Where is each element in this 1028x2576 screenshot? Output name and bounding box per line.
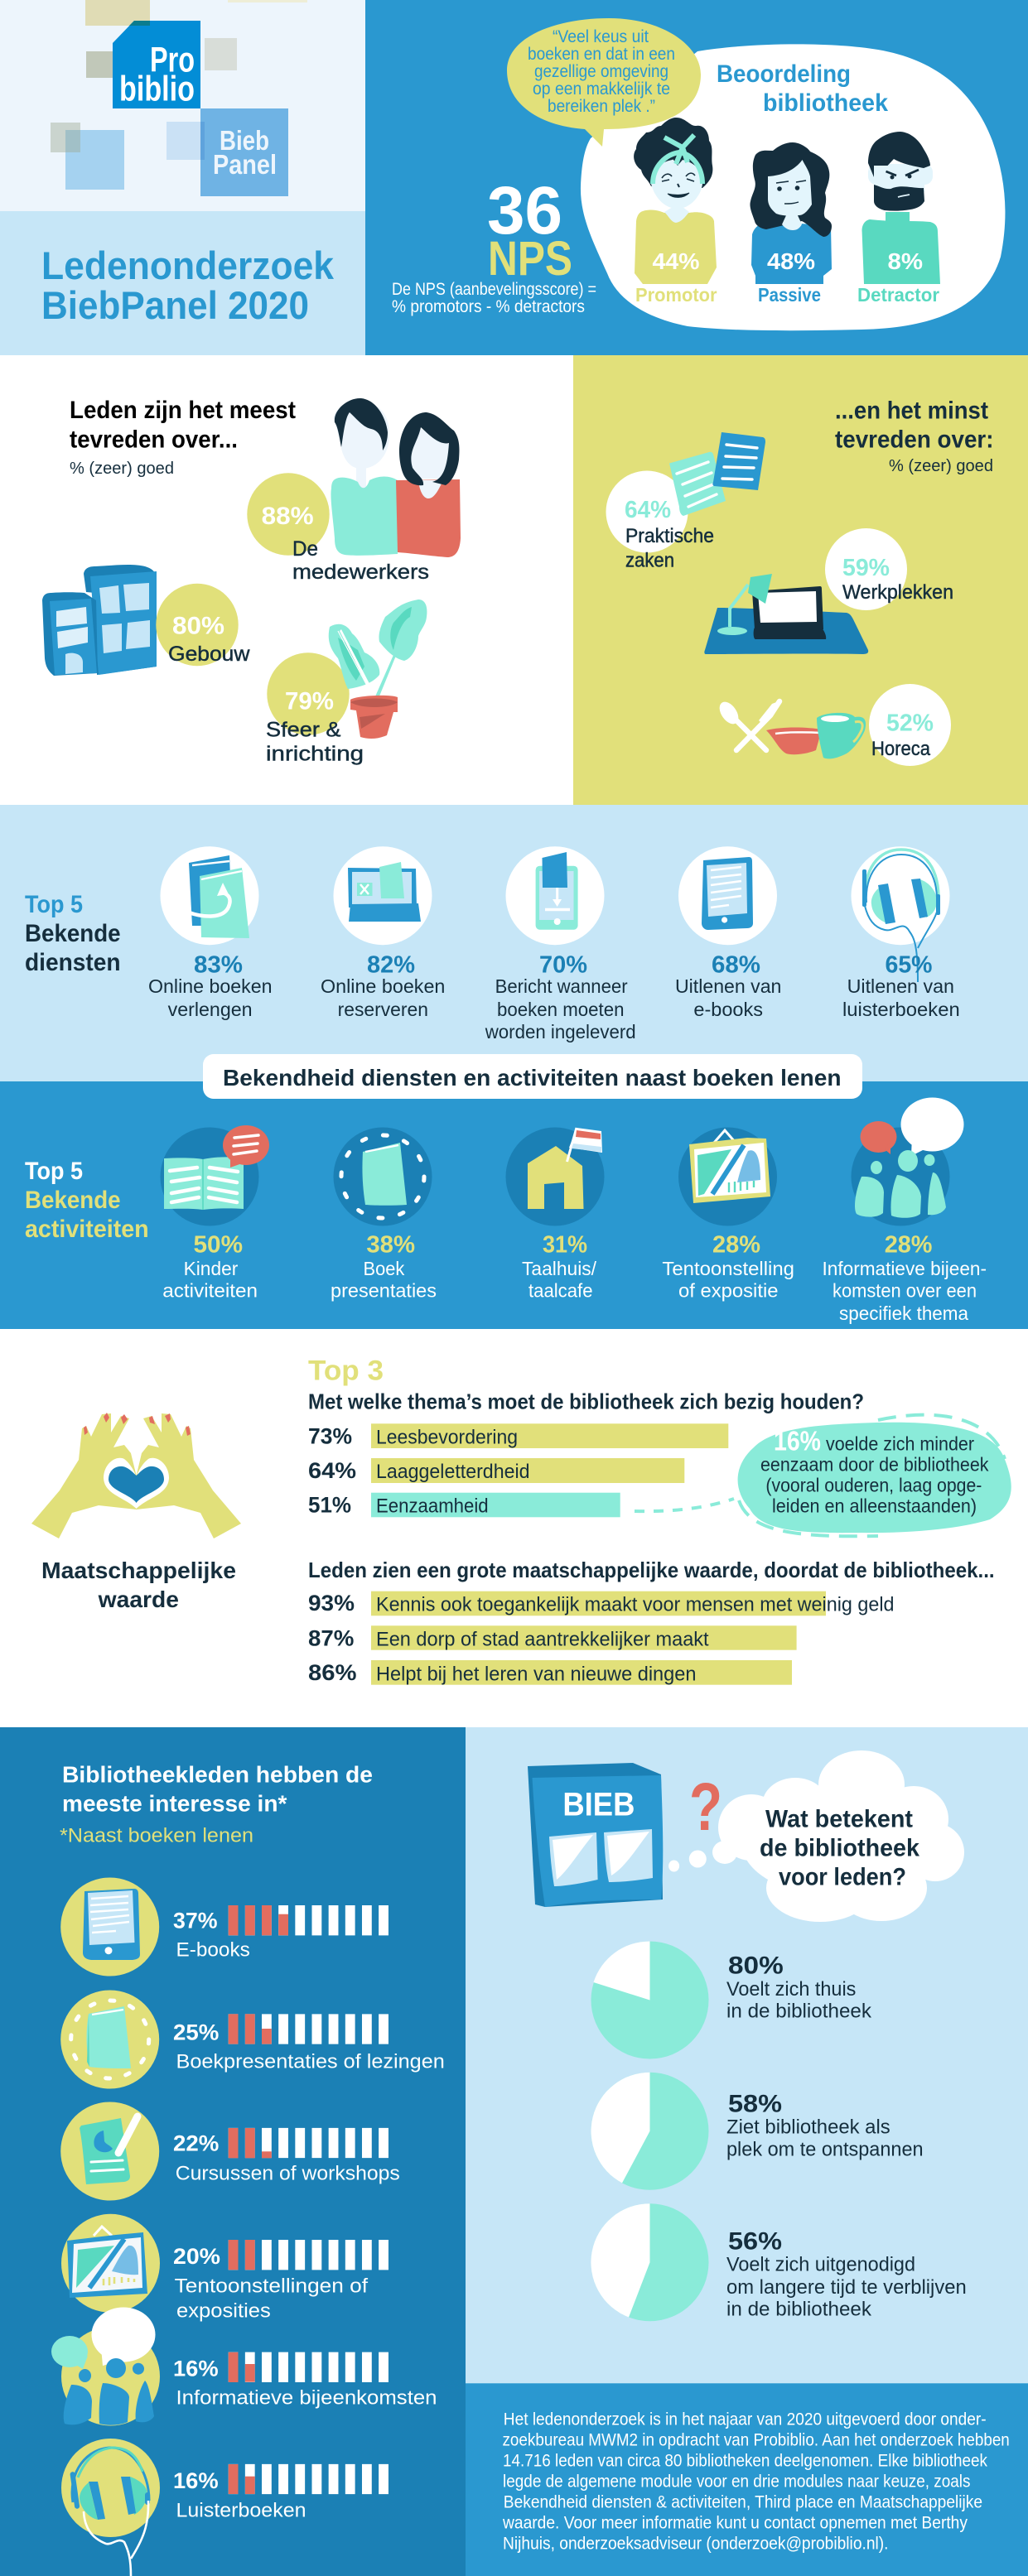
stat: uitgenodigd: om langere tijd te verblijven: [726, 2276, 967, 2299]
figure: promotor: Promotor: [635, 284, 717, 306]
service: e-books: Uitlenen van: [675, 975, 781, 997]
stat: sfeer en inrichting: Sfeer &: [266, 718, 341, 741]
activity: tentoonstelling: of expositie: [678, 1280, 779, 1302]
heading: top 3: Top 3: [308, 1355, 384, 1387]
title: [41, 243, 335, 327]
logo: BiebPanel: [200, 108, 288, 196]
service: online boeken verlengen: Online boeken: [148, 975, 272, 997]
stat: voelt zich thuis: in de bibliotheek: [726, 2001, 872, 2023]
row: informatieve bijeenkomsten: Informatieve bijeenkomsten: [176, 2386, 437, 2409]
heading: top 5 diensten: Top 5: [25, 891, 83, 918]
stat: voelt zich thuis: Voelt zich thuis: [726, 1978, 856, 2001]
text block: onderzoeksverantwoording: waarde. Voor meer informatie kunt u contact opnemen met Berthy: [502, 2513, 968, 2532]
logo: BiebPanel: Bieb: [220, 125, 269, 156]
NPS number: NPS: [488, 232, 572, 286]
logo: Probiblio: [113, 21, 200, 109]
heading: top 5 diensten: Bekende: [25, 920, 121, 947]
stat: praktische zaken: [606, 470, 714, 571]
stat: ontspannen: Ziet bibliotheek als: [726, 2116, 890, 2139]
row: e-books: E-books: [176, 1938, 250, 1961]
text block: onderzoeksverantwoording: Bekendheid diensten & activiteiten, Third place en Maatschappelijke: [504, 2492, 982, 2511]
heading: top 5 diensten: diensten: [25, 949, 121, 976]
heading: meest tevreden: % (zeer) goed: [70, 460, 174, 478]
icon: desk with laptop: [704, 574, 868, 654]
bar chart: maatschappelijke waarde: 86%: [308, 1660, 356, 1685]
quote bubble: op een makkelijk te: [533, 79, 670, 99]
service: bericht inleveren: [485, 846, 636, 1042]
icon: tableware: [716, 699, 866, 758]
stat: voelt zich thuis: [726, 1952, 872, 2023]
cloud with question: de bibliotheek: [760, 1835, 919, 1862]
quote bubble: [507, 18, 701, 147]
heading: meest tevreden: Leden zijn het meest: [70, 397, 296, 424]
text block: onderzoeksverantwoording: 14.716 leden van circa 80 bibliotheken deelgenomen. Elke bibliotheek: [503, 2451, 987, 2470]
service: luisterboeken: Uitlenen van: [847, 975, 954, 997]
bar chart: thema's: 64%: [308, 1458, 356, 1483]
stat: uitgenodigd: 56%: [728, 2228, 782, 2256]
service: online boeken reserveren: 82%: [367, 951, 415, 978]
bar chart: thema's: Laaggeletterdheid: [376, 1461, 530, 1483]
heading: Beoordeling bibliotheek: bibliotheek: [763, 89, 888, 117]
bar chart: maatschappelijke waarde: Kennis ook toegankelijk maakt voor mensen met weinig geld: [376, 1594, 895, 1616]
heading: top 5 diensten: [25, 891, 121, 976]
row: informatieve bijeenkomsten: 16%: [173, 2356, 219, 2381]
heading: minst tevreden: % (zeer) goed: [889, 457, 993, 475]
row: tentoonstellingen: Tentoonstellingen of: [175, 2275, 368, 2297]
row: boekpresentaties: [60, 1991, 445, 2088]
stat: praktische zaken: 64%: [625, 497, 671, 523]
icon: building: [42, 565, 157, 676]
stat: uitgenodigd: in de bibliotheek: [726, 2299, 872, 2321]
activity: boek presentaties: 38%: [366, 1231, 415, 1258]
stat: sfeer en inrichting: [266, 652, 364, 766]
heading: meeste interesse: [60, 1761, 373, 1847]
heading: meeste interesse: meeste interesse in*: [62, 1790, 287, 1816]
bar chart: maatschappelijke waarde: [308, 1591, 895, 1686]
stat: ontspannen: [726, 2091, 924, 2161]
stat: sfeer en inrichting: 79%: [285, 688, 334, 715]
white rating blob: [581, 44, 1005, 330]
logo: BiebPanel: Panel: [213, 149, 277, 180]
activity: taalhuis: taalcafe: [528, 1280, 593, 1302]
panel: wat betekent de bibliotheek: [466, 1727, 1028, 2384]
stat: medewerkers: De: [292, 537, 318, 561]
stat: uitgenodigd: [726, 2228, 967, 2321]
activity: informatieve bijeenkomsten: specifiek thema: [839, 1302, 968, 1324]
service: online boeken reserveren: [321, 846, 445, 1020]
title: Ledenonderzoek: [41, 243, 335, 287]
callout: minder eenzaam: eenzaam door de bibliotheek: [760, 1454, 989, 1476]
service: e-books: 68%: [712, 951, 760, 978]
activity: boek presentaties: presentaties: [331, 1280, 437, 1302]
service: luisterboeken: 65%: [885, 951, 933, 978]
row: cursussen: [60, 2102, 400, 2201]
heading: top 5 activiteiten: activiteiten: [25, 1216, 149, 1243]
callout: minder eenzaam: 16%: [774, 1426, 821, 1457]
service: luisterboeken: luisterboeken: [842, 999, 960, 1020]
stat: horeca: Horeca: [871, 738, 931, 760]
banner: Bekendheid diensten en activiteiten: [203, 1054, 862, 1099]
NPS definition: [392, 280, 596, 316]
pie chart: 80%: [591, 1941, 709, 2058]
callout: minder eenzaam: [635, 1415, 1011, 1536]
question heading: Met welke thema’s moet de bibliotheek zich bezig houden?: [308, 1389, 864, 1414]
icon: papers: [669, 432, 765, 516]
stat: horeca: [869, 684, 951, 766]
pie chart: 56%: [591, 2203, 709, 2321]
icon: BIEB building: BIEB: [562, 1787, 635, 1823]
cloud with question: [668, 1750, 964, 1922]
question heading: Leden zien een grote maatschappelijke waarde, doordat de bibliotheek...: [308, 1558, 995, 1582]
activity: tentoonstelling: Tentoonstelling: [662, 1258, 794, 1279]
service: online boeken verlengen: [148, 846, 272, 1020]
row: luisterboeken: [61, 2439, 389, 2576]
text block: onderzoeksverantwoording: legde de algemene module voor en drie modules naar keuze, zoals: [503, 2472, 971, 2491]
activity: taalhuis: 31%: [543, 1231, 587, 1258]
service: e-books: e-books: [693, 999, 763, 1020]
service: bericht inleveren: worden ingeleverd: [485, 1021, 636, 1042]
activity: kinder activiteiten: activiteiten: [162, 1280, 258, 1302]
callout: minder eenzaam: leiden en alleenstaanden): [772, 1495, 977, 1517]
heading: top 5 activiteiten: Bekende: [25, 1187, 121, 1214]
stat: gebouw: Gebouw: [168, 643, 250, 666]
activity: kinder activiteiten: Kinder: [184, 1258, 239, 1279]
cloud with question: voor leden?: [779, 1864, 906, 1891]
stat: werkplekken: 59%: [842, 555, 890, 581]
panel: most satisfied: [42, 397, 461, 766]
heading: maatschappelijke waarde: waarde: [98, 1587, 179, 1612]
activity: boek presentaties: Boek: [363, 1258, 405, 1279]
service: online boeken verlengen: verlengen: [168, 999, 253, 1020]
NPS number: [487, 173, 572, 286]
heading: Beoordeling bibliotheek: [717, 60, 888, 117]
service: online boeken reserveren: Online boeken: [321, 975, 445, 997]
activity: informatieve bijeenkomsten: 28%: [885, 1231, 933, 1258]
callout: minder eenzaam: voelde zich minder: [826, 1433, 974, 1455]
banner: Bekendheid diensten en activiteiten: Bekendheid diensten en activiteiten naast boeken lenen: [223, 1065, 842, 1091]
bar chart: thema's: 51%: [308, 1493, 351, 1518]
heading: top 5 activiteiten: Top 5: [25, 1158, 83, 1185]
panel: title: [0, 211, 365, 355]
row: luisterboeken: 16%: [173, 2468, 219, 2493]
figure: passive: 48%: [767, 248, 815, 274]
figure: passive: [750, 142, 832, 306]
panel: NPS score: [365, 0, 1028, 355]
logo: Probiblio: Pro: [150, 40, 195, 79]
quote bubble: boeken en dat in een: [528, 45, 675, 64]
stat: praktische zaken: zaken: [625, 550, 674, 571]
icon: question mark: ?: [689, 1769, 722, 1845]
service: online boeken reserveren: reserveren: [338, 999, 428, 1020]
stat: voelt zich thuis: 80%: [728, 1952, 784, 1979]
heading: minst tevreden: [835, 397, 994, 475]
panel: logo header: [0, 0, 365, 211]
heading: meest tevreden: tevreden over...: [70, 426, 238, 454]
panel: top 5 bekende diensten: [0, 805, 1028, 1081]
panel: top 5 bekende activiteiten: [0, 1081, 1028, 1329]
activity: tentoonstelling: 28%: [712, 1231, 760, 1258]
text block: onderzoeksverantwoording: [502, 2410, 1010, 2553]
heading: minst tevreden: tevreden over:: [835, 426, 994, 454]
panel: meeste interesse: [0, 1727, 466, 2576]
heading: meest tevreden: [70, 397, 296, 478]
bar chart: thema's: 73%: [308, 1423, 352, 1448]
quote bubble: “Veel keus uit: [553, 27, 649, 46]
figure: detractor: 8%: [888, 248, 923, 274]
NPS definition: % promotors - % detractors: [392, 297, 585, 316]
panel: maatschappelijke waarde: [31, 1355, 1011, 1686]
bar chart: thema's: [308, 1423, 728, 1518]
activity: informatieve bijeenkomsten: komsten over een: [833, 1280, 977, 1302]
service: e-books: [675, 846, 781, 1020]
quote bubble: bereiken plek .”: [548, 97, 655, 116]
row: boekpresentaties: Boekpresentaties of lezingen: [176, 2050, 445, 2073]
stat: medewerkers: medewerkers: [292, 561, 429, 584]
icon: hands forming heart: [31, 1413, 241, 1538]
heading: minst tevreden: ...en het minst: [835, 397, 988, 424]
text block: onderzoeksverantwoording: Het ledenonderzoek is in het najaar van 2020 uitgevoerd door onder-: [504, 2410, 987, 2429]
icon: colleagues: [331, 398, 461, 557]
bar chart: maatschappelijke waarde: 93%: [308, 1591, 355, 1615]
heading: meeste interesse: *Naast boeken lenen: [60, 1824, 253, 1847]
row: tentoonstellingen: 20%: [173, 2244, 220, 2269]
heading: maatschappelijke waarde: Maatschappelijke: [41, 1558, 236, 1583]
stat: ontspannen: plek om te ontspannen: [726, 2138, 924, 2161]
activity: boek presentaties: [331, 1128, 437, 1302]
row: e-books: [60, 1878, 389, 1976]
activity: informatieve bijeenkomsten: Informatieve bijeen-: [822, 1258, 987, 1279]
bar chart: maatschappelijke waarde: 87%: [308, 1625, 354, 1650]
service: bericht inleveren: Bericht wanneer: [495, 975, 628, 997]
bar chart: thema's: Leesbevordering: [376, 1426, 518, 1449]
service: bericht inleveren: 70%: [539, 951, 587, 978]
label: werkplekken: Werkplekken: [842, 581, 953, 604]
service: online boeken verlengen: 83%: [194, 951, 243, 978]
stat: gebouw: 80%: [172, 612, 224, 639]
figure: passive: Passive: [758, 284, 821, 306]
stat: werkplekken: [825, 528, 907, 610]
icon: plant: [329, 599, 427, 739]
panel: least satisfied: [573, 355, 1028, 805]
stat: medewerkers: [247, 473, 429, 584]
text block: onderzoeksverantwoording: Nijhuis, onderzoeksadviseur (onderzoek@probiblio.nl).: [503, 2534, 888, 2553]
icon: BIEB building: [528, 1763, 663, 1907]
row: tentoonstellingen: [61, 2214, 389, 2322]
stat: uitgenodigd: Voelt zich uitgenodigd: [726, 2254, 915, 2276]
NPS number: 36: [487, 173, 562, 248]
service: bericht inleveren: boeken moeten: [497, 999, 625, 1020]
figure: promotor: 44%: [653, 248, 700, 274]
stat: ontspannen: 58%: [728, 2091, 782, 2118]
stat: horeca: 52%: [886, 710, 934, 737]
row: informatieve bijeenkomsten: [51, 2307, 437, 2426]
activity: taalhuis: [505, 1128, 605, 1302]
activity: taalhuis: Taalhuis/: [522, 1258, 597, 1279]
row: luisterboeken: Luisterboeken: [176, 2499, 306, 2521]
stat: sfeer en inrichting: inrichting: [266, 743, 364, 766]
pie chart: 58%: [591, 2073, 709, 2190]
row: boekpresentaties: 25%: [173, 2020, 219, 2044]
title: BiebPanel 2020: [41, 283, 309, 327]
bar chart: maatschappelijke waarde: Een dorp of stad aantrekkelijker maakt: [376, 1629, 709, 1651]
activity: kinder activiteiten: 50%: [194, 1231, 243, 1258]
activity: kinder activiteiten: [161, 1125, 269, 1302]
panel: footer note: [466, 2383, 1028, 2576]
logo: Probiblio: biblio: [119, 70, 195, 109]
row: cursussen: Cursussen of workshops: [176, 2162, 400, 2184]
cloud with question: Wat betekent: [765, 1806, 913, 1833]
heading: Beoordeling bibliotheek: Beoordeling: [717, 60, 851, 88]
row: tentoonstellingen: exposities: [176, 2299, 271, 2322]
heading: maatschappelijke waarde: [41, 1558, 236, 1612]
row: cursussen: 22%: [173, 2131, 219, 2155]
NPS definition: De NPS (aanbevelingsscore) =: [392, 280, 596, 299]
row: e-books: 37%: [173, 1908, 217, 1933]
stat: praktische zaken: Praktische: [625, 525, 714, 547]
figure: detractor: [857, 132, 940, 306]
figure: detractor: Detractor: [857, 284, 939, 306]
heading: meeste interesse: Bibliotheekleden hebben de: [62, 1761, 373, 1787]
callout: minder eenzaam: (vooral ouderen, laag opge-: [765, 1475, 982, 1496]
bar chart: thema's: Eenzaamheid: [376, 1495, 489, 1518]
heading: top 5 activiteiten: [25, 1158, 149, 1243]
stat: medewerkers: 88%: [262, 503, 314, 530]
quote bubble: gezellige omgeving: [534, 62, 668, 81]
figure: promotor: [634, 118, 717, 306]
service: luisterboeken: [842, 846, 960, 1020]
activity: informatieve bijeenkomsten: [822, 1098, 987, 1324]
stat: gebouw: [156, 584, 250, 666]
activity: tentoonstelling: [662, 1128, 794, 1302]
bar chart: maatschappelijke waarde: Helpt bij het leren van nieuwe dingen: [376, 1663, 696, 1686]
